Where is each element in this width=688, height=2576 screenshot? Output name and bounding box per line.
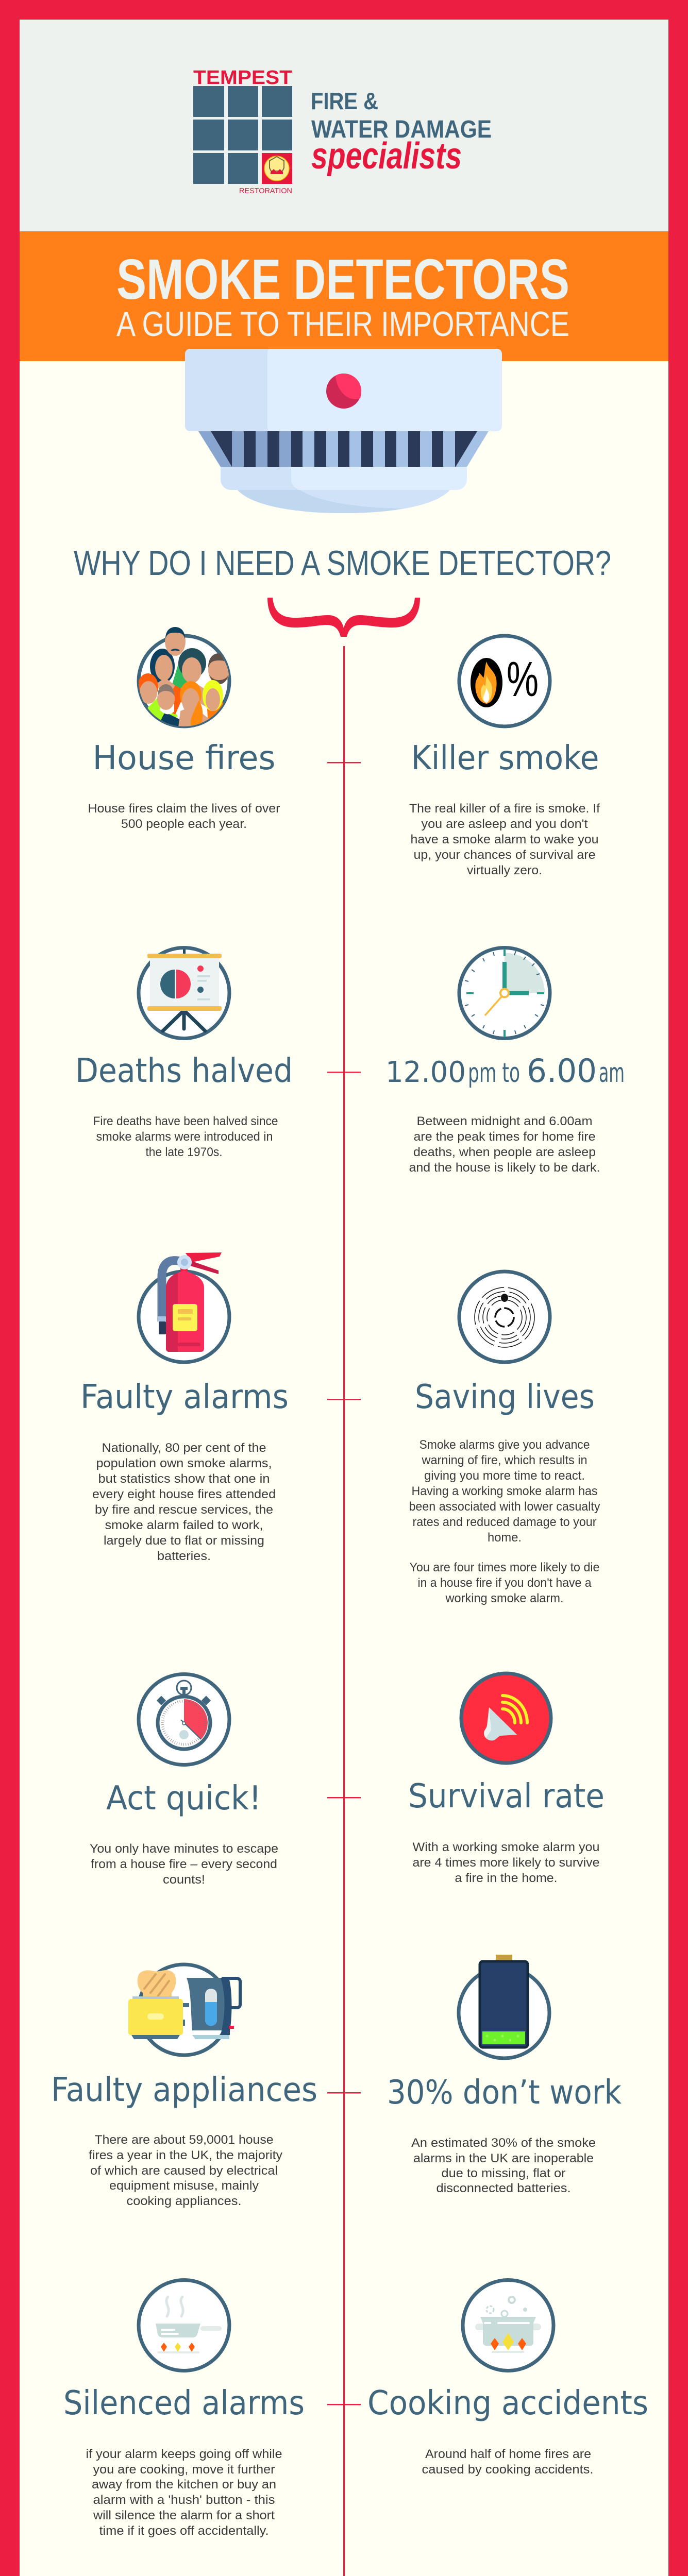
heading: Act quick! <box>106 1780 261 1818</box>
heading: am <box>599 1058 625 1089</box>
body text <box>88 802 280 831</box>
panel: saving lives <box>409 1272 600 1605</box>
icon: zero percent flame: % <box>507 652 539 707</box>
body text: cooking appliances. <box>127 2194 241 2208</box>
connector tick <box>327 2092 361 2094</box>
body text <box>412 1840 600 1885</box>
body text: 500 people each year. <box>121 817 247 831</box>
icon: alarm seen from below <box>459 1272 550 1362</box>
body text: alarms in the UK are inoperable <box>413 2151 594 2165</box>
logo: Tempest fire and water damage specialists: TEMPEST <box>193 67 292 89</box>
connector tick <box>327 762 361 764</box>
body text: population own smoke alarms, <box>96 1456 272 1470</box>
logo: Tempest fire and water damage specialists: WATER DAMAGE <box>311 116 492 143</box>
heading: 6.00 <box>527 1052 597 1090</box>
heading: Survival rate <box>408 1777 605 1816</box>
body text: Around half of home fires are <box>425 2447 591 2461</box>
icon: boiling pot on flames <box>463 2280 553 2371</box>
body text: smoke alarm failed to work, <box>105 1518 263 1532</box>
body text <box>93 1114 278 1159</box>
icon: group of people <box>138 627 230 738</box>
body text: but statistics show that one in <box>98 1472 270 1486</box>
body text <box>92 1441 276 1563</box>
body text: away from the kitchen or buy an <box>92 2478 276 2492</box>
body text: the late 1970s. <box>145 1145 223 1159</box>
panel: faulty alarms <box>80 1252 361 1563</box>
body text: you are asleep and you don't <box>422 817 588 831</box>
body text: in a house fire if you don't have a <box>417 1576 592 1590</box>
body text: largely due to flat or missing <box>104 1534 264 1548</box>
body text: warning of fire, which results in <box>422 1453 588 1467</box>
body text: up, your chances of survival are <box>413 848 596 862</box>
icon: stopwatch <box>139 1674 229 1765</box>
body text: time if it goes off accidentally. <box>99 2524 269 2538</box>
icon: zero percent flame <box>459 636 550 726</box>
body text: every eight house fires attended <box>92 1487 276 1501</box>
body text <box>409 1438 600 1605</box>
body text: An estimated 30% of the smoke <box>411 2136 596 2150</box>
logo: Tempest fire and water damage specialists: RESTORATION <box>239 187 292 195</box>
body text: working smoke alarm. <box>445 1591 564 1605</box>
panel: act quick <box>90 1674 361 1887</box>
panel: survival rate <box>408 1673 605 1885</box>
header logo panel <box>20 20 668 231</box>
body text: alarm with a 'hush' button - this <box>93 2493 275 2507</box>
main title: SMOKE DETECTORS <box>116 248 569 311</box>
body text <box>90 1842 278 1887</box>
icon: fire extinguisher <box>139 1252 229 1362</box>
body text: home. <box>488 1531 522 1545</box>
title banner <box>20 231 668 361</box>
icon: clock <box>459 948 550 1039</box>
body text: batteries. <box>157 1549 211 1563</box>
logo: Tempest fire and water damage specialists: specialists <box>311 135 462 177</box>
body text: disconnected batteries. <box>436 2181 571 2195</box>
panel: midnight to 6am <box>385 948 625 1175</box>
body text: caused by cooking accidents. <box>422 2463 594 2477</box>
body text: will silence the alarm for a short <box>93 2509 275 2522</box>
body text: are 4 times more likely to survive <box>412 1856 600 1870</box>
connector tick <box>327 1072 361 1073</box>
heading: pm to <box>468 1058 526 1089</box>
panel: silenced alarms <box>63 2280 361 2538</box>
body text: Nationally, 80 per cent of the <box>102 1441 266 1455</box>
body text: Smoke alarms give you advance <box>419 1438 590 1452</box>
heading: Cooking accidents <box>367 2384 648 2422</box>
body text: Between midnight and 6.00am <box>416 1114 593 1128</box>
body text: virtually zero. <box>467 863 542 877</box>
body text: You only have minutes to escape <box>90 1842 278 1856</box>
body text: by fire and rescue services, the <box>95 1503 273 1517</box>
body text: a fire in the home. <box>455 1871 558 1885</box>
icon: frying pan on flames <box>139 2280 229 2371</box>
body text: are the peak times for home fire <box>413 1130 596 1144</box>
connector tick <box>327 1797 361 1798</box>
body text <box>411 2136 596 2195</box>
panel: cooking accidents <box>367 2280 648 2477</box>
body text: rates and reduced damage to your <box>412 1515 597 1529</box>
body text: deaths, when people are asleep <box>413 1145 596 1159</box>
panel: 30% don't work <box>387 1955 622 2195</box>
body text: have a smoke alarm to wake you <box>410 833 599 846</box>
body text <box>422 2447 594 2477</box>
body text: Fire deaths have been halved since <box>93 1114 278 1128</box>
connector tick <box>327 2404 361 2405</box>
icon: low battery <box>459 1955 549 2058</box>
body text: and the house is likely to be dark. <box>409 1161 600 1175</box>
body text: been associated with lower casualty <box>409 1500 600 1514</box>
illustration: smoke detector <box>185 349 502 513</box>
icon: presentation chart <box>139 948 229 1039</box>
icon: siren speaker <box>461 1673 551 1763</box>
body text <box>409 1114 600 1175</box>
body text: The real killer of a fire is smoke. If <box>409 802 600 816</box>
panel: deaths halved <box>75 948 361 1159</box>
body text: you are cooking, move it further <box>93 2463 275 2477</box>
body text: giving you more time to react. <box>424 1469 585 1483</box>
body text: fires a year in the UK, the majority <box>89 2148 282 2162</box>
body text: With a working smoke alarm you <box>412 1840 600 1854</box>
heading: Deaths halved <box>75 1052 293 1090</box>
body text: if your alarm keeps going off while <box>86 2447 282 2461</box>
connector tick <box>327 1399 361 1400</box>
heading: Faulty appliances <box>51 2071 317 2109</box>
body text: You are four times more likely to die <box>409 1561 600 1574</box>
body text <box>89 2133 282 2208</box>
icon: toaster and kettle <box>128 1964 240 2055</box>
heading: Faulty alarms <box>80 1378 289 1416</box>
body text <box>409 802 600 877</box>
body text: of which are caused by electrical <box>90 2164 278 2178</box>
body text <box>86 2447 282 2538</box>
subtitle: A GUIDE TO THEIR IMPORTANCE <box>116 304 569 344</box>
body text: equipment misuse, mainly <box>109 2179 259 2193</box>
body text: smoke alarms were introduced in <box>96 1130 273 1144</box>
body text: due to missing, flat or <box>441 2166 566 2180</box>
body text: from a house fire – every second <box>91 1857 277 1871</box>
brace <box>267 598 420 637</box>
body text: Having a working smoke alarm has <box>411 1484 598 1498</box>
body text: counts! <box>163 1873 205 1887</box>
body text: House fires claim the lives of over <box>88 802 280 816</box>
heading: 12.00 <box>385 1056 466 1089</box>
timeline centre line <box>343 646 345 2576</box>
heading: House fires <box>93 739 275 777</box>
panel: faulty appliances <box>51 1964 361 2208</box>
heading: Silenced alarms <box>63 2384 305 2422</box>
logo: Tempest fire and water damage specialists <box>193 67 492 195</box>
panel: house fires <box>88 627 361 831</box>
panel: killer smoke <box>409 636 600 877</box>
logo: Tempest fire and water damage specialists: FIRE & <box>311 88 378 114</box>
heading: Saving lives <box>415 1378 595 1416</box>
heading: Killer smoke <box>411 739 599 777</box>
body text: There are about 59,0001 house <box>95 2133 273 2147</box>
heading: 30% don’t work <box>387 2074 622 2112</box>
